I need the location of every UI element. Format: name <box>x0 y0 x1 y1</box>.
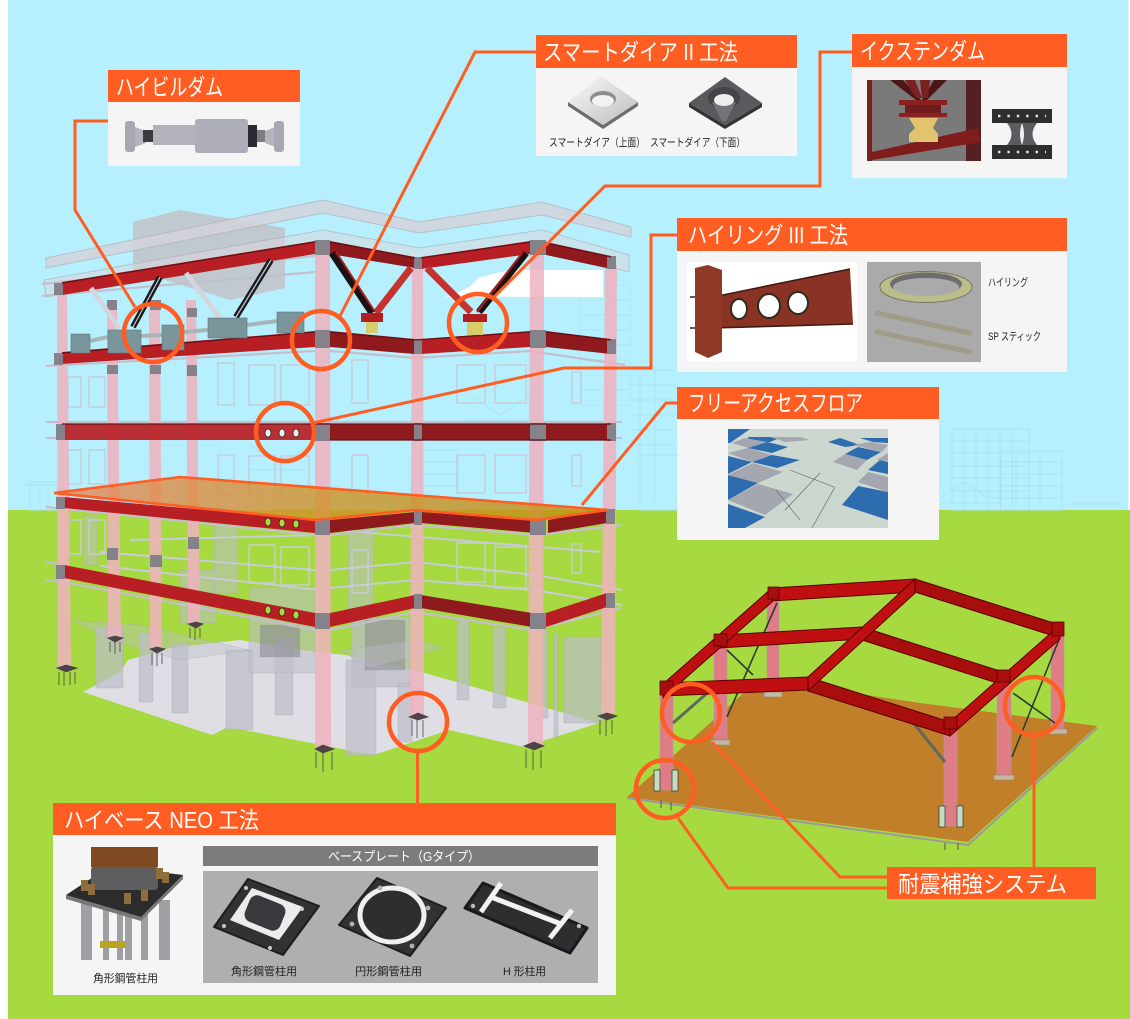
panel: ハイベース NEO 工法: ハイベース NEO 工法 <box>64 807 259 833</box>
caption: スマートダイア（下面）: スマートダイア（下面） <box>650 135 745 149</box>
caption: ハイリング: ハイリング <box>988 275 1028 289</box>
panel: フリーアクセスフロア <box>677 387 939 540</box>
panel: フリーアクセスフロア: フリーアクセスフロア <box>688 390 863 416</box>
icon: damper <box>125 119 284 153</box>
heading: フリーアクセスフロア <box>677 387 939 419</box>
image: base plate with column <box>66 847 183 960</box>
icon: shear panel plate <box>992 109 1052 159</box>
frame beams <box>663 579 1060 736</box>
building frame <box>42 200 631 772</box>
background: city skyline outlines <box>22 285 1120 510</box>
column feet <box>711 692 1067 780</box>
heading: イクステンダム <box>852 34 1067 67</box>
frame column caps <box>660 587 1064 729</box>
icon: スマートダイア下面 <box>689 77 762 129</box>
panel: ハイビルダム: ハイビルダム <box>116 74 223 100</box>
lower floor walls <box>72 515 601 755</box>
steel beams <box>54 240 616 629</box>
cloud behind roof <box>445 270 603 297</box>
image: floor tiles <box>728 429 888 528</box>
heading: ハイリング III 工法 <box>677 218 1067 251</box>
steel columns <box>57 250 617 747</box>
column base details <box>654 770 963 827</box>
caption: 円形鋼管柱用: 円形鋼管柱用 <box>355 964 422 978</box>
orange raised floor <box>54 477 608 520</box>
panel: スマートダイア II 工法: スマートダイア II 工法 <box>543 39 738 65</box>
image: beam with ring openings <box>687 262 857 361</box>
panel: スマートダイア II 工法 <box>536 35 797 156</box>
panel: イクステンダム <box>852 34 1067 178</box>
seismic retrofit steel frame <box>627 579 1097 850</box>
band: ベースプレート（Gタイプ）: ベースプレート（Gタイプ） <box>328 849 480 864</box>
highlight circles on the building <box>124 294 507 751</box>
panel: ハイリング III 工法 <box>677 218 1067 372</box>
icon: スマートダイア上面 <box>568 76 638 129</box>
damper braces <box>71 260 304 353</box>
heading: ハイベース NEO 工法 <box>53 803 616 835</box>
caption: 角形鋼管柱用: 角形鋼管柱用 <box>231 964 297 978</box>
column joints <box>54 240 616 629</box>
V braces with shear panels <box>332 252 526 335</box>
leader lines <box>75 52 1034 888</box>
foundation plate <box>627 686 1097 842</box>
label: 耐震補強システム: 耐震補強システム <box>898 871 1067 897</box>
plate gallery <box>203 871 598 983</box>
image: hiring ring and SP sticks <box>867 262 981 362</box>
image: installed shear panel <box>867 80 981 161</box>
retrofit highlight circles <box>662 684 720 742</box>
icon: round column plate <box>339 878 446 956</box>
roof: parapet and slab <box>44 200 631 300</box>
panel: ハイベース NEO 工法 <box>53 803 616 995</box>
heading: スマートダイア II 工法 <box>536 35 797 68</box>
background: ground <box>8 510 1130 1019</box>
heading: ハイビルダム <box>108 70 300 102</box>
panel: イクステンダム: イクステンダム <box>860 38 985 64</box>
band: ベースプレート（Gタイプ） <box>203 846 598 866</box>
icon: square column plate <box>214 879 319 955</box>
caption: スマートダイア（上面）: スマートダイア（上面） <box>549 135 645 149</box>
frame braces <box>673 688 945 762</box>
panel: ハイリング III 工法: ハイリング III 工法 <box>688 222 848 248</box>
panel: ハイビルダム <box>108 70 300 166</box>
column base plates <box>57 622 617 772</box>
caption: H 形柱用: H 形柱用 <box>503 964 546 978</box>
floor edge orange outline <box>54 477 608 520</box>
caption: 角形鋼管柱用 (column): 角形鋼管柱用 <box>93 971 158 985</box>
icon: H column plate <box>465 883 587 953</box>
caption: SP スティック: SP スティック <box>988 330 1041 343</box>
windows and thin slab lines <box>42 256 625 630</box>
frame columns <box>660 597 1064 826</box>
beam web openings <box>265 429 299 619</box>
background: sky <box>8 0 1128 511</box>
